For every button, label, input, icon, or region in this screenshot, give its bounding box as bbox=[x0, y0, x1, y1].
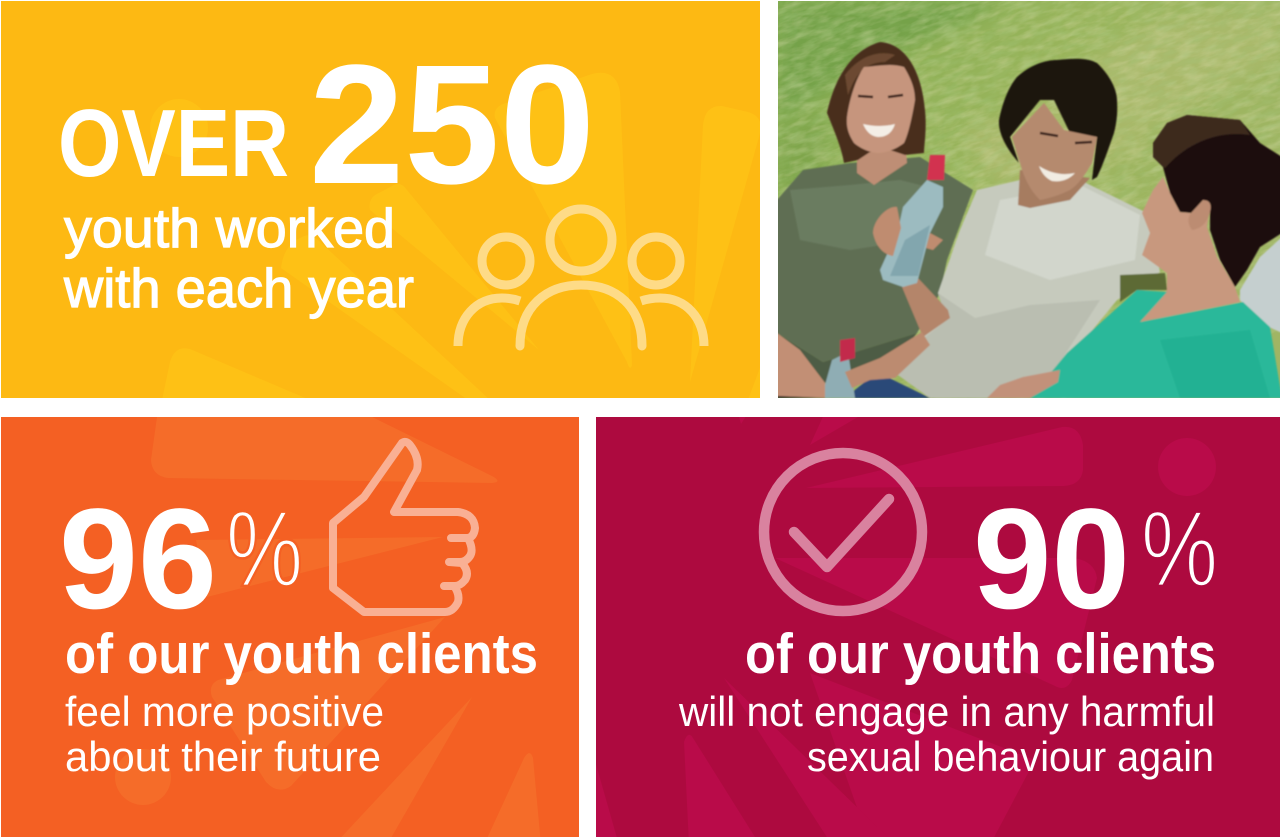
man 3 ear bbox=[1188, 200, 1211, 230]
heading: over: OVER bbox=[58, 90, 289, 197]
man 1 face bbox=[847, 65, 915, 153]
bottle cap bbox=[927, 155, 945, 180]
man 1 neck bbox=[856, 150, 908, 186]
panel: over 250 youth bbox=[1, 1, 761, 400]
man 2 face bbox=[1012, 103, 1097, 200]
jeans bbox=[853, 378, 930, 398]
man 1 forearm bbox=[902, 277, 950, 337]
icon: thumbs up bbox=[333, 442, 475, 612]
man 2 neck bbox=[1018, 170, 1090, 208]
man 3 skin bbox=[1140, 177, 1240, 322]
man 1 hair highlights bbox=[845, 53, 895, 95]
stat: 96 percent: % bbox=[226, 488, 303, 609]
stat: 90 percent bbox=[973, 480, 1218, 639]
man 2 hair bbox=[999, 59, 1117, 180]
man 1 shirt bbox=[777, 157, 973, 362]
bottle 1 bbox=[880, 180, 943, 287]
other fingers bbox=[926, 233, 943, 250]
hand bbox=[987, 370, 1060, 398]
background rays bbox=[150, 73, 761, 400]
background rays bbox=[590, 410, 1216, 838]
man 2 eyes bbox=[1040, 133, 1092, 143]
man 2 smile bbox=[1039, 166, 1075, 181]
icon: three people bbox=[458, 209, 704, 346]
text: youth worked with each year: youth worked bbox=[64, 197, 395, 259]
bottle 2 bbox=[825, 352, 855, 398]
photo subjects bbox=[777, 42, 1280, 398]
background rays bbox=[115, 410, 541, 838]
stat: 90 percent: % bbox=[1141, 488, 1218, 609]
grass texture bbox=[778, 1, 1280, 398]
grass patches bbox=[778, 1, 1280, 190]
hand on bottle bbox=[873, 207, 901, 256]
man 1 eyes bbox=[858, 95, 903, 97]
text: youth worked with each year: with each year bbox=[63, 257, 414, 319]
body text: about their future bbox=[65, 733, 381, 780]
panel: 90 percent no harmful behaviour bbox=[590, 410, 1280, 838]
man 3 hair bbox=[1153, 115, 1280, 287]
subheading: of our youth clients bbox=[65, 622, 538, 686]
man 2 shirt bbox=[924, 180, 1161, 358]
ball bbox=[1240, 237, 1280, 333]
body text: sexual behaviour again bbox=[807, 733, 1214, 780]
man 3 hair highlights bbox=[1153, 115, 1250, 168]
man 3 shirt bbox=[1030, 290, 1280, 398]
icon: check mark in circle bbox=[764, 453, 922, 611]
heading: 250: 250 bbox=[309, 30, 595, 220]
body text: will not engage in any harmful bbox=[678, 688, 1215, 735]
body text: feel more positive bbox=[65, 688, 384, 735]
stat: 90 percent: 90 bbox=[973, 480, 1130, 639]
man 1 hair bbox=[827, 42, 926, 163]
body text bbox=[678, 688, 1215, 780]
text: youth worked with each year bbox=[63, 197, 414, 319]
panel: photo of three laughing young men bbox=[778, 1, 1280, 398]
panel: 96 percent feel more positive bbox=[1, 410, 579, 838]
subheading: of our youth clients bbox=[745, 622, 1216, 686]
stat: 96 percent bbox=[59, 480, 303, 639]
body text bbox=[65, 688, 384, 780]
man 1 arm and hand bbox=[778, 332, 826, 398]
stat: 96 percent: 96 bbox=[59, 480, 217, 639]
man 1 smile bbox=[863, 124, 895, 137]
dark grass patch bbox=[1120, 273, 1167, 302]
hand on jeans bbox=[845, 332, 930, 388]
